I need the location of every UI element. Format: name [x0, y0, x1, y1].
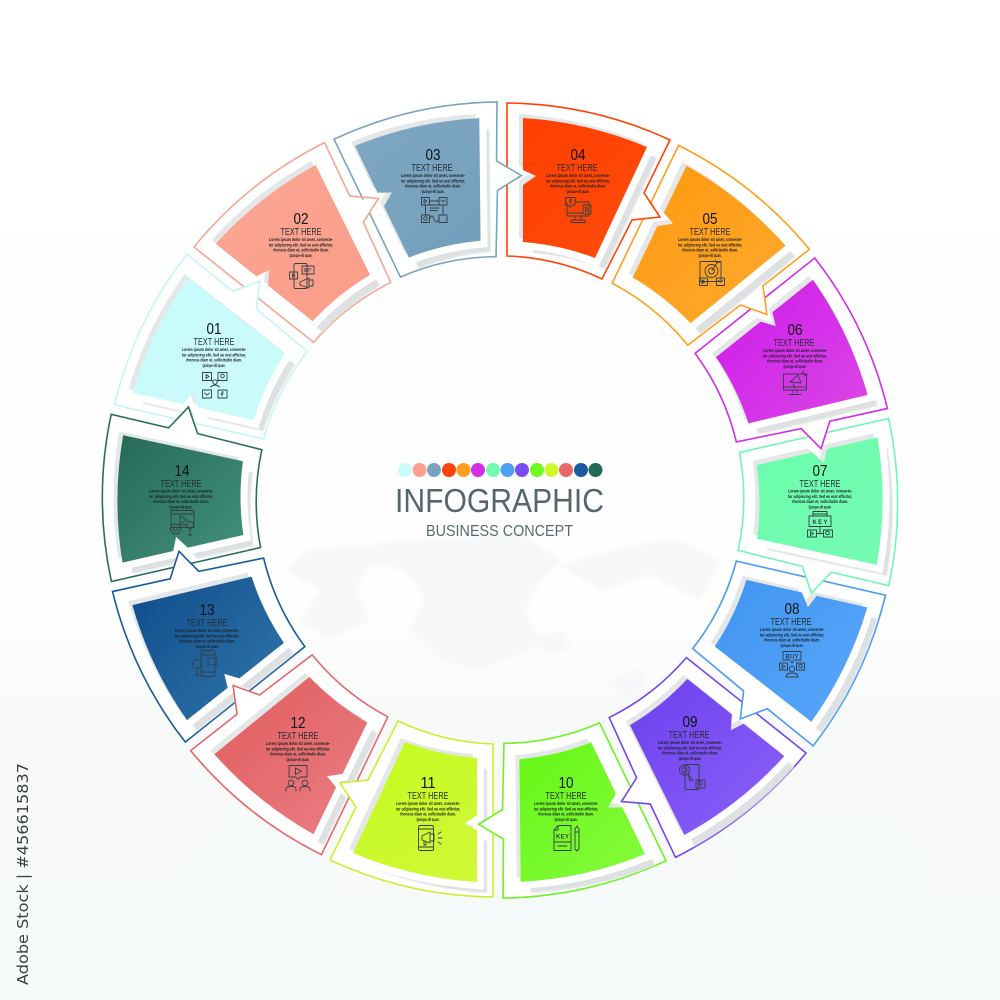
panel 06: [677, 258, 916, 495]
icon 06: monitor with megaphone: [784, 371, 807, 394]
body 01: tur adipiscing elit. Sed eu erat efficitur,: [182, 352, 246, 357]
fill 09: [598, 669, 784, 853]
outline 09: [567, 643, 806, 880]
title: INFOGRAPHIC: [395, 482, 604, 519]
body 03: tur adipiscing elit. Sed eu erat efficitur,: [401, 178, 465, 183]
number 03: 03: [426, 147, 440, 164]
body 05: Lorem ipsum dolor sit amet, consecte-: [678, 237, 742, 242]
band 10: [469, 724, 641, 904]
body 09: Lorem ipsum dolor sit amet, consecte-: [658, 740, 722, 745]
paper 02: [216, 147, 402, 331]
body 07: [788, 488, 852, 509]
centre title block: [395, 463, 604, 540]
panel 10: [443, 702, 666, 931]
band 04: [519, 114, 643, 254]
shadow 02: [226, 158, 412, 342]
outline 04: [507, 103, 670, 279]
band 14: [91, 407, 255, 559]
body 01: Lorem ipsum dolor sit amet, consecte-: [182, 347, 246, 352]
paper 09: [598, 669, 784, 853]
body 10: tur adipiscing elit. Sed eu erat efficitur,: [534, 806, 598, 811]
body 11: Quisque elit quam.: [416, 817, 440, 822]
panel 01: [115, 246, 322, 444]
heading 03: TEXT HERE: [412, 163, 453, 174]
segment ring: [75, 69, 925, 931]
body 10: [534, 801, 598, 822]
icon 07: key boxes: [808, 512, 832, 537]
heading 11: TEXT HERE: [408, 791, 449, 802]
colour dots: [398, 463, 602, 477]
outline 07: [717, 418, 925, 617]
body 07: Lorem ipsum dolor sit amet, consecte-: [788, 488, 852, 494]
band 08: [699, 572, 863, 724]
shadow 04: [533, 129, 657, 269]
paper 05: [626, 166, 798, 346]
body 01: rhoncus diam et, sollicitudin diam.: [186, 358, 242, 363]
number 12: 12: [290, 715, 306, 732]
icon 13: phone, key and bubble: [192, 650, 217, 676]
heading 14: TEXT HERE: [160, 479, 202, 490]
heading 04: TEXT HERE: [556, 163, 598, 174]
paper 08: [703, 576, 867, 728]
body 12: Quisque elit quam.: [286, 757, 310, 762]
arrow: 02 to 03 overlay: [342, 183, 381, 222]
body 03: [401, 173, 465, 194]
outline 05: [602, 145, 825, 375]
panel 07: [717, 418, 925, 617]
icon 04: monitor with social bubble: [566, 198, 591, 222]
body 02: [269, 237, 333, 258]
heading 07: TEXT HERE: [800, 479, 841, 490]
body 12: rhoncus diam et, sollicitudin diam.: [270, 752, 326, 757]
panel 14: [75, 383, 283, 582]
panel 04: [507, 103, 670, 279]
icon 01: network of messages: [202, 372, 227, 398]
number 11: 11: [420, 775, 436, 792]
body 08: Quisque elit quam.: [780, 643, 804, 648]
panel 05: [602, 145, 825, 375]
shadow 08: [713, 587, 877, 739]
subtitle: BUSINESS CONCEPT: [426, 523, 573, 540]
outline 12: [175, 625, 398, 855]
body 14: rhoncus diam et, sollicitudin diam.: [153, 499, 209, 504]
body 02: Lorem ipsum dolor sit amet, consecte-: [269, 237, 333, 242]
body 04: rhoncus diam et, sollicitudin diam.: [550, 184, 606, 189]
body 06: Quisque elit quam.: [784, 364, 806, 369]
panel 03: [334, 69, 557, 298]
paper 13: [110, 536, 296, 720]
outline 14: [75, 383, 283, 582]
shadow 07: [751, 448, 915, 600]
icon 14: video, gear and key: [170, 510, 194, 535]
body 06: [763, 348, 827, 369]
panel 08: [678, 556, 885, 754]
body 11: [396, 801, 460, 822]
band 03: [351, 88, 523, 268]
heading 10: TEXT HERE: [546, 791, 587, 802]
body 04: Quisque elit quam.: [566, 189, 590, 194]
body 07: Quisque elit quam.: [808, 504, 832, 509]
number 13: 13: [200, 602, 214, 619]
fill 12: [202, 654, 374, 834]
body 05: tur adipiscing elit. Sed eu erat efficitur,: [678, 242, 742, 247]
paper 12: [202, 654, 374, 834]
icon 08: buy bubble and person: [780, 652, 804, 677]
band 01: [129, 268, 293, 420]
heading 08: TEXT HERE: [770, 617, 812, 628]
outline 10: [443, 702, 666, 931]
heading 02: TEXT HERE: [280, 227, 322, 238]
shadow 01: [143, 283, 307, 435]
body 14: [149, 488, 213, 509]
shadow 11: [363, 753, 487, 893]
outline 03: [334, 69, 557, 298]
shadow 06: [714, 291, 900, 475]
heading 09: TEXT HERE: [668, 730, 710, 741]
shadow 10: [483, 739, 655, 919]
body 11: rhoncus diam et, sollicitudin diam.: [400, 812, 456, 817]
band 13: [106, 532, 292, 716]
body 10: Lorem ipsum dolor sit amet, consecte-: [534, 801, 598, 806]
fill 03: [355, 92, 527, 272]
body 07: rhoncus diam et, sollicitudin diam.: [792, 499, 848, 504]
icon 02: phone chat megaphone: [290, 264, 314, 288]
body 14: Quisque elit quam.: [170, 504, 192, 509]
outline 13: [84, 505, 323, 742]
stock id label: Adobe Stock | #456615837: [14, 763, 32, 985]
body 03: Quisque elit quam.: [422, 189, 444, 194]
body 05: rhoncus diam et, sollicitudin diam.: [682, 248, 738, 253]
paper 10: [473, 728, 645, 908]
paper 01: [133, 272, 297, 424]
body 12: Lorem ipsum dolor sit amet, consecte-: [266, 741, 330, 746]
panel 09: [567, 643, 806, 880]
heading 13: TEXT HERE: [186, 618, 228, 629]
fill 05: [626, 166, 798, 346]
band 11: [349, 738, 473, 878]
body 08: [760, 627, 824, 648]
fill 02: [216, 147, 402, 331]
icon 09: phone with key and search: [680, 764, 705, 790]
paper 07: [741, 437, 905, 589]
number 06: 06: [788, 322, 802, 339]
fill 14: [95, 411, 259, 563]
number 10: 10: [558, 775, 574, 792]
band 06: [700, 276, 886, 460]
number 14: 14: [174, 463, 190, 480]
band 02: [212, 143, 398, 327]
body 06: rhoncus diam et, sollicitudin diam.: [767, 359, 823, 364]
body 14: Lorem ipsum dolor sit amet, consecte-: [149, 488, 213, 494]
body 08: Lorem ipsum dolor sit amet, consecte-: [760, 627, 824, 632]
icon 08: buy bubble and person: BUY: [786, 654, 798, 660]
body 13: Lorem ipsum dolor sit amet, consecte-: [175, 628, 239, 633]
number 04: 04: [570, 147, 586, 164]
paper 04: [523, 118, 647, 258]
icon 05: target window: [700, 260, 724, 286]
body 04: [546, 173, 610, 194]
shadow 09: [608, 680, 794, 864]
shadow 12: [212, 665, 384, 845]
body 09: Quisque elit quam.: [678, 756, 702, 761]
body 06: tur adipiscing elit. Sed eu erat efficitur,: [763, 353, 827, 358]
body 09: tur adipiscing elit. Sed eu erat efficitur,: [658, 745, 722, 750]
fill 13: [110, 536, 296, 720]
number 05: 05: [702, 211, 718, 228]
body 13: rhoncus diam et, sollicitudin diam.: [179, 639, 235, 644]
body 04: tur adipiscing elit. Sed eu erat efficitur,: [546, 178, 610, 183]
outline 01: [115, 246, 322, 444]
body 01: [182, 347, 246, 368]
body 11: Lorem ipsum dolor sit amet, consecte-: [396, 801, 460, 806]
fill 06: [704, 280, 890, 464]
number 01: 01: [206, 321, 222, 338]
body 10: Quisque elit quam.: [554, 817, 578, 822]
number 07: 07: [812, 463, 828, 480]
outline 08: [678, 556, 885, 754]
body 02: Quisque elit quam.: [290, 253, 312, 258]
heading 12: TEXT HERE: [278, 731, 319, 742]
body 14: tur adipiscing elit. Sed eu erat efficitur,: [149, 494, 213, 499]
fill 10: [473, 728, 645, 908]
icon 07: key boxes: KEY: [812, 520, 828, 526]
band 12: [198, 650, 370, 830]
shadow 14: [105, 422, 269, 574]
fill 08: [703, 576, 867, 728]
outline 11: [330, 721, 493, 897]
body 02: tur adipiscing elit. Sed eu erat efficitur,: [269, 242, 333, 247]
body 04: Lorem ipsum dolor sit amet, consecte-: [546, 173, 610, 178]
body 13: [175, 628, 239, 649]
icon 03: flow of boxes: [422, 198, 447, 222]
number 08: 08: [784, 601, 800, 618]
body 08: rhoncus diam et, sollicitudin diam.: [764, 638, 820, 643]
icon 11: phone with megaphone: [418, 826, 442, 850]
heading 01: TEXT HERE: [194, 337, 235, 348]
body 03: Lorem ipsum dolor sit amet, consecte-: [401, 173, 465, 178]
body 08: tur adipiscing elit. Sed eu erat efficitur,: [760, 632, 824, 637]
body 01: Quisque elit quam.: [202, 363, 226, 368]
panel 12: [175, 625, 398, 855]
panel 02: [194, 120, 433, 357]
band 05: [622, 162, 794, 342]
shadow 13: [120, 547, 306, 731]
body 06: Lorem ipsum dolor sit amet, consecte-: [763, 348, 827, 353]
body 07: tur adipiscing elit. Sed eu erat efficitur,: [788, 494, 852, 499]
body 09: rhoncus diam et, sollicitudin diam.: [662, 751, 718, 756]
heading 05: TEXT HERE: [690, 227, 731, 238]
shadow 05: [636, 177, 808, 357]
panel 11: [330, 721, 493, 897]
body 05: Quisque elit quam.: [698, 253, 722, 258]
shadow 03: [365, 103, 537, 283]
number 02: 02: [294, 211, 308, 228]
body 03: rhoncus diam et, sollicitudin diam.: [405, 184, 461, 189]
number 09: 09: [682, 714, 698, 731]
fill 11: [353, 742, 477, 882]
outline 06: [677, 258, 916, 495]
outline 02: [194, 120, 433, 357]
heading 06: TEXT HERE: [774, 338, 815, 349]
icon 12: video bubble and two people: [286, 766, 310, 791]
body 12: [266, 741, 330, 762]
paper 06: [704, 280, 890, 464]
fill 07: [741, 437, 905, 589]
body 05: [678, 237, 742, 258]
fill 04: [523, 118, 647, 258]
fill 01: [133, 272, 297, 424]
body 13: Quisque elit quam.: [196, 644, 218, 649]
body 12: tur adipiscing elit. Sed eu erat efficitur,: [266, 746, 330, 751]
paper 14: [95, 411, 259, 563]
band 09: [594, 665, 780, 849]
body 10: rhoncus diam et, sollicitudin diam.: [538, 812, 594, 817]
paper 11: [353, 742, 477, 882]
panel 13: [84, 505, 323, 742]
icon 10: key document and pencil: [554, 826, 579, 851]
body 02: rhoncus diam et, sollicitudin diam.: [273, 248, 329, 253]
icon 10: key document and pencil: KEY: [556, 834, 569, 840]
body 13: tur adipiscing elit. Sed eu erat efficitur,: [175, 633, 239, 638]
body 09: [658, 740, 722, 761]
body 11: tur adipiscing elit. Sed eu erat efficitur,: [396, 806, 460, 811]
band 07: [737, 433, 901, 585]
world map backdrop: [180, 532, 930, 980]
paper 03: [355, 92, 527, 272]
